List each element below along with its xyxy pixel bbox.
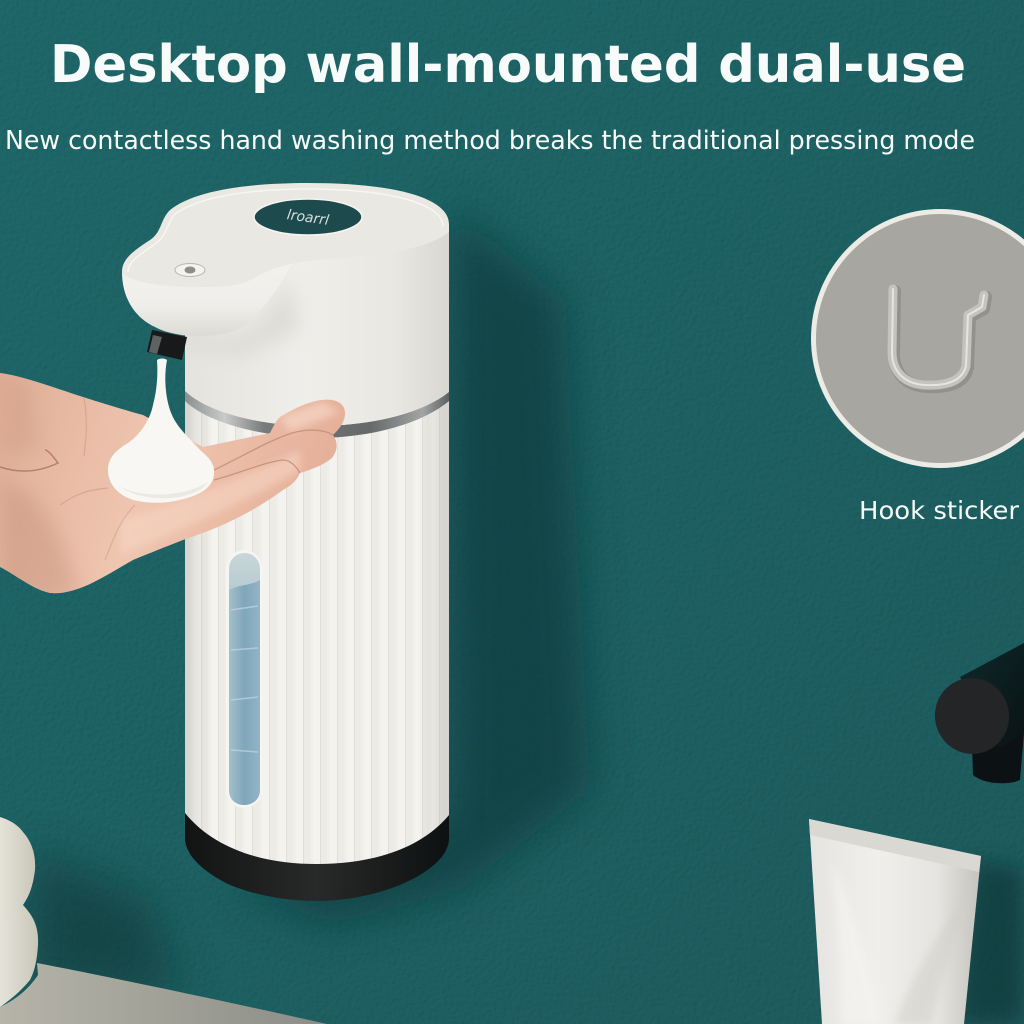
- dispenser shadow on wall: [230, 205, 590, 925]
- metal ring: [185, 390, 449, 438]
- top lid: [122, 183, 449, 287]
- lower-left shadow by towels: [30, 850, 180, 1000]
- counter surface: [0, 963, 327, 1024]
- toothpaste and faucet shadow: [958, 860, 1024, 1024]
- finger creases: [214, 430, 333, 470]
- toothpaste tube: [809, 819, 981, 1024]
- nozzle tip: [147, 330, 187, 360]
- hand: [0, 373, 345, 600]
- black faucet: [926, 643, 1024, 783]
- icon: transparent hook: [892, 289, 986, 387]
- sensor hole: [175, 264, 205, 276]
- faucet spout: [972, 733, 1024, 783]
- hand shading: [0, 388, 338, 594]
- display panel: [254, 199, 362, 235]
- hook sticker inset: [814, 212, 1024, 466]
- lid highlight line: [128, 189, 443, 272]
- soap dispenser: [122, 183, 449, 901]
- display panel: lroarrl: [286, 207, 330, 229]
- subtitle: New contactless hand washing method breaks the traditional pressing mode: [5, 126, 975, 156]
- hook sticker label: Hook sticker: [859, 496, 1020, 525]
- ribbed body: [185, 390, 449, 870]
- cap: [185, 225, 449, 426]
- black base: [185, 813, 449, 901]
- nozzle head: [122, 260, 292, 336]
- liquid window: [226, 550, 262, 808]
- faucet arm: [960, 643, 1024, 748]
- faucet end cap: [926, 670, 1018, 762]
- soap foam: [108, 358, 214, 503]
- shadow under head: [185, 280, 300, 355]
- towels: [0, 817, 38, 1007]
- title: Desktop wall-mounted dual-use: [50, 35, 966, 95]
